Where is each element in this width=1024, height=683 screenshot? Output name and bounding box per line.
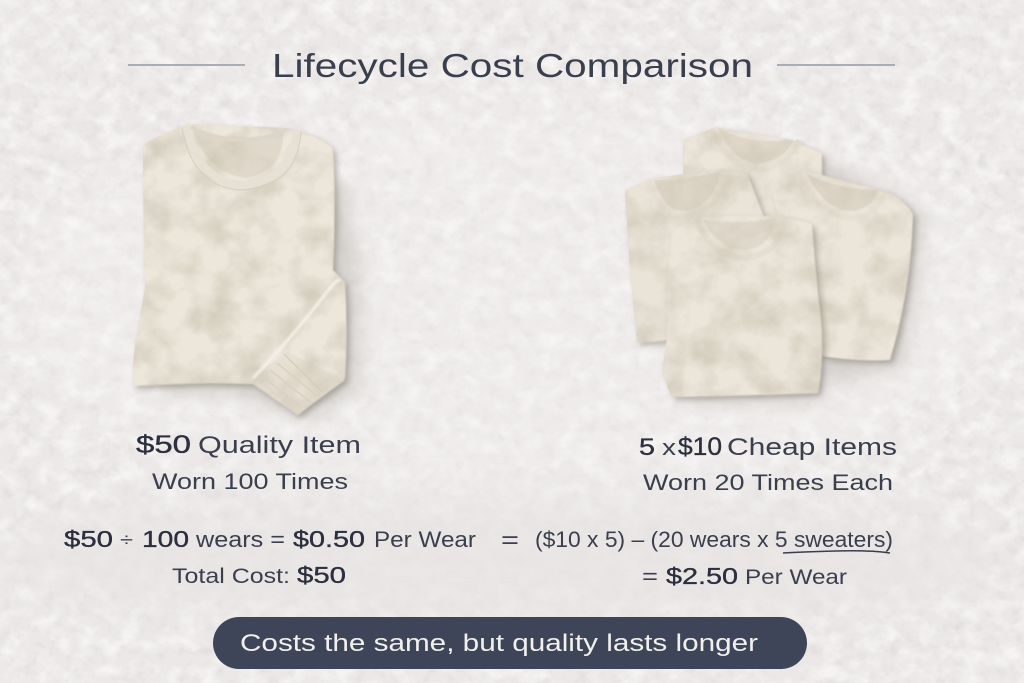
left calculation: wears =: [195, 527, 285, 552]
equals sign: =: [501, 527, 519, 554]
right item label: x: [662, 435, 676, 460]
left calculation: Total Cost:: [172, 565, 290, 588]
left calculation: $0.50: [293, 526, 365, 552]
right item label: 5: [639, 434, 655, 461]
right calculation: [535, 527, 893, 589]
left item label: Quality Item: [198, 432, 361, 459]
left sweater: [625, 170, 766, 342]
left calculation: [64, 526, 476, 588]
sweater collar: [182, 126, 301, 190]
left item label: $50: [136, 431, 191, 459]
right item label: Cheap Items: [727, 434, 897, 461]
front sweater: [662, 216, 822, 397]
right calculation: Per Wear: [745, 566, 847, 589]
right item label: $10: [678, 433, 722, 461]
right calculation: =: [642, 564, 658, 589]
left calculation: 100: [142, 526, 189, 552]
left calculation: ÷: [120, 530, 133, 550]
left calculation: $50: [64, 526, 113, 552]
left calculation: $50: [297, 562, 346, 588]
back sweater: [683, 127, 822, 240]
right calculation: $2.50: [666, 563, 738, 589]
sweater sleeve and cuff: [253, 280, 340, 408]
left item label: [136, 431, 361, 494]
callout: conclusion pill: Costs the same, but quality lasts longer: [240, 630, 758, 657]
right calculation: ($10 x 5) – (20 wears x 5 sweaters): [535, 527, 893, 552]
icon: single quality sweater: [133, 124, 360, 420]
left item label: Worn 100 Times: [152, 469, 348, 494]
callout: conclusion pill: [213, 617, 807, 669]
right item label: [639, 433, 897, 495]
left calculation: Per Wear: [374, 527, 476, 552]
right sweater: [772, 170, 913, 360]
right item label: Worn 20 Times Each: [643, 470, 893, 495]
title: Lifecycle Cost Comparison: [272, 47, 753, 84]
icon: stack of four cheap sweaters: [625, 127, 925, 400]
